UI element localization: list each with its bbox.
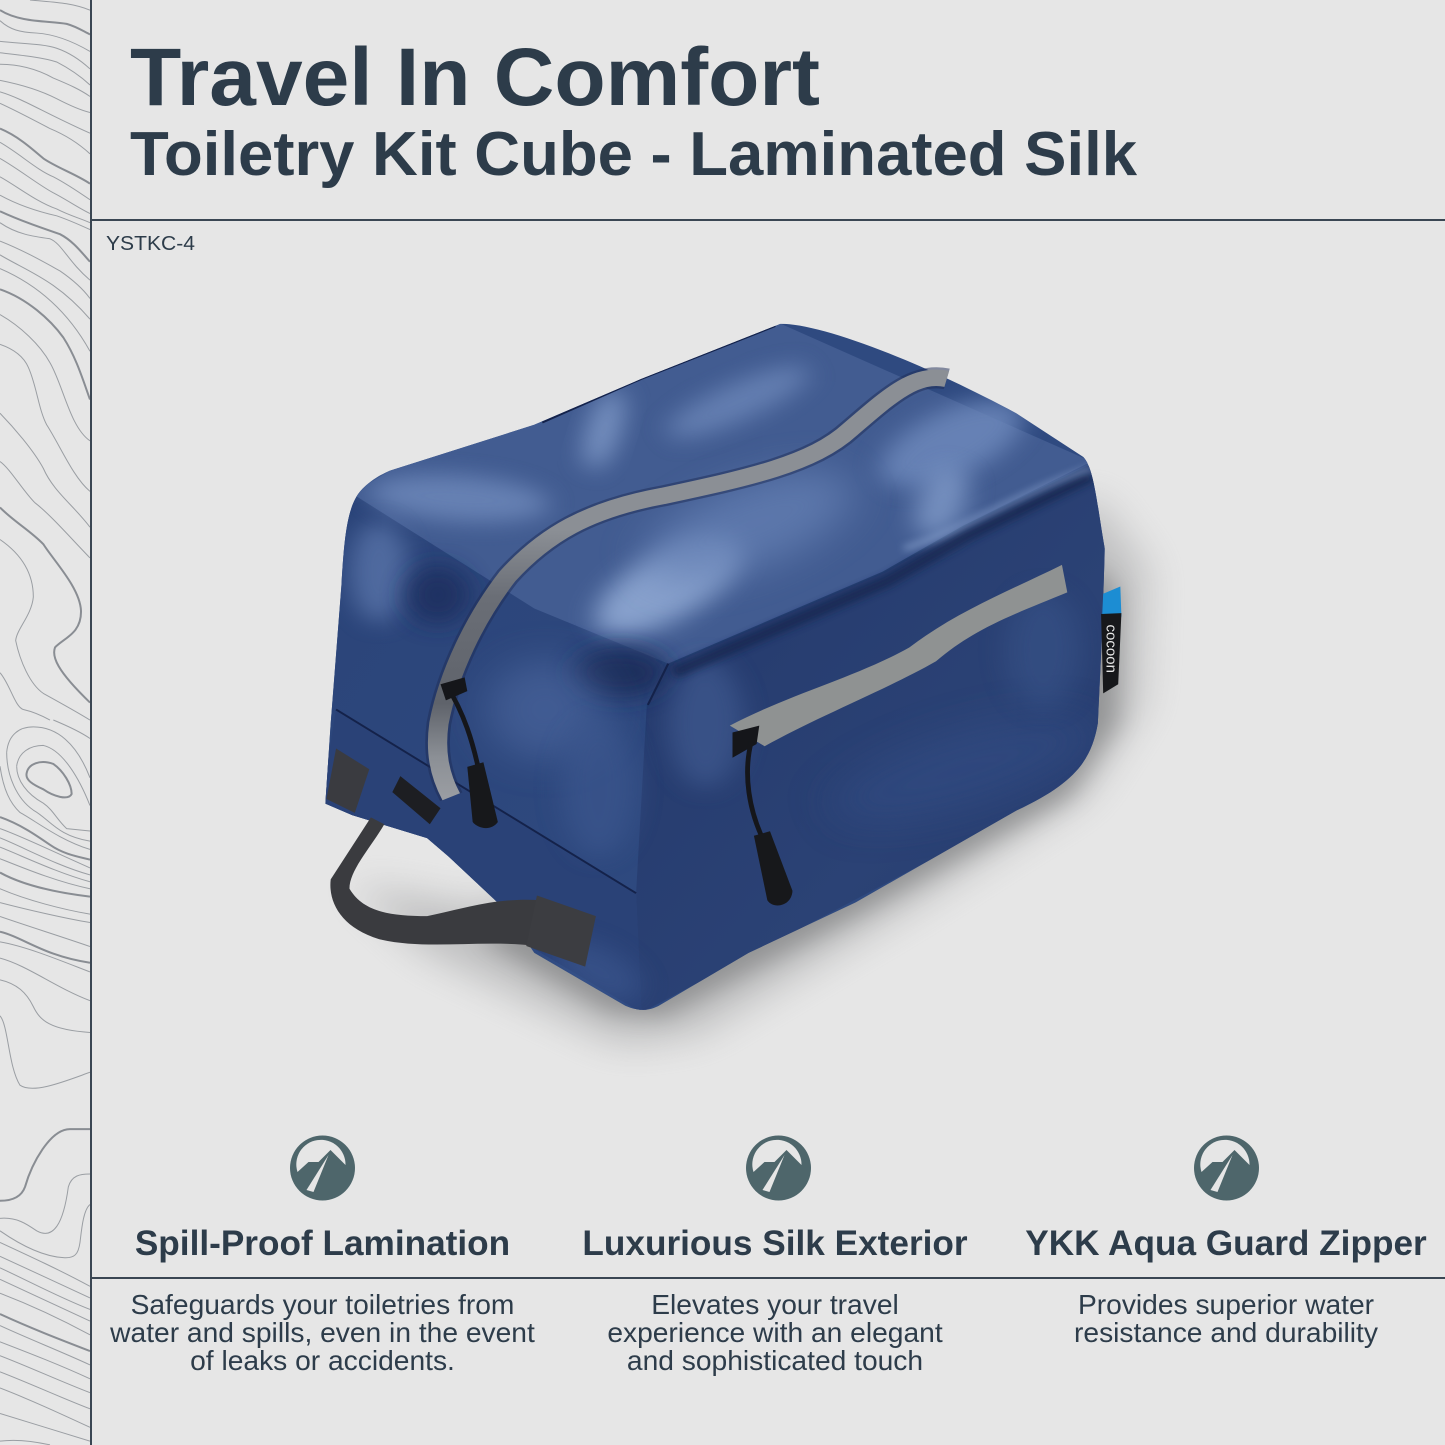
bag body with silk shading: [320, 310, 1124, 1026]
description: of leaks or accidents.: [190, 1344, 455, 1376]
pocket zipper: [730, 565, 1067, 746]
topographic contour strip: [0, 0, 90, 1445]
description: experience with an elegant: [607, 1316, 943, 1348]
description: Safeguards your toiletries from: [131, 1288, 514, 1320]
description: Provides superior water: [1078, 1288, 1374, 1320]
heading: Luxurious Silk Exterior: [582, 1224, 968, 1263]
product photo: navy silk toiletry cube bag: [320, 310, 1145, 1045]
main zipper pull: [441, 677, 498, 828]
icon: mountain badge: [290, 1136, 355, 1200]
heading: Spill-Proof Lamination: [135, 1224, 510, 1263]
product code: YSTKC-4: [106, 232, 195, 255]
pocket zipper pull: [732, 726, 792, 905]
description: and sophisticated touch: [627, 1344, 923, 1376]
feature: spill-proof lamination: [109, 1136, 535, 1376]
left end face: [320, 494, 668, 1013]
description: resistance and durability: [1074, 1316, 1379, 1348]
rule under title: [91, 219, 1445, 221]
cocoon brand tag: [1101, 586, 1121, 693]
title: Travel In Comfort: [130, 32, 820, 123]
description: water and spills, even in the event: [109, 1316, 535, 1348]
vertical rule: [90, 0, 92, 1445]
rule above descriptions: [91, 1277, 1445, 1279]
main zipper: [438, 378, 947, 797]
bottom strip: [325, 758, 642, 1010]
icon: mountain badge: [746, 1136, 811, 1200]
top face: [352, 324, 1091, 664]
seams: [336, 326, 775, 893]
feature: luxurious silk exterior: [582, 1136, 968, 1376]
silk highlights: [349, 353, 1108, 1014]
description: Elevates your travel: [651, 1288, 899, 1320]
bag drop shadow: [352, 494, 1145, 1045]
cocoon brand tag: cocoon: [1102, 625, 1119, 673]
webbing handle: [326, 749, 596, 967]
feature: ykk aqua guard zipper: [1025, 1136, 1427, 1348]
front face: [636, 464, 1113, 1013]
heading: YKK Aqua Guard Zipper: [1025, 1224, 1427, 1263]
subtitle: Toiletry Kit Cube - Laminated Silk: [130, 120, 1138, 189]
icon: mountain badge: [1194, 1136, 1259, 1200]
